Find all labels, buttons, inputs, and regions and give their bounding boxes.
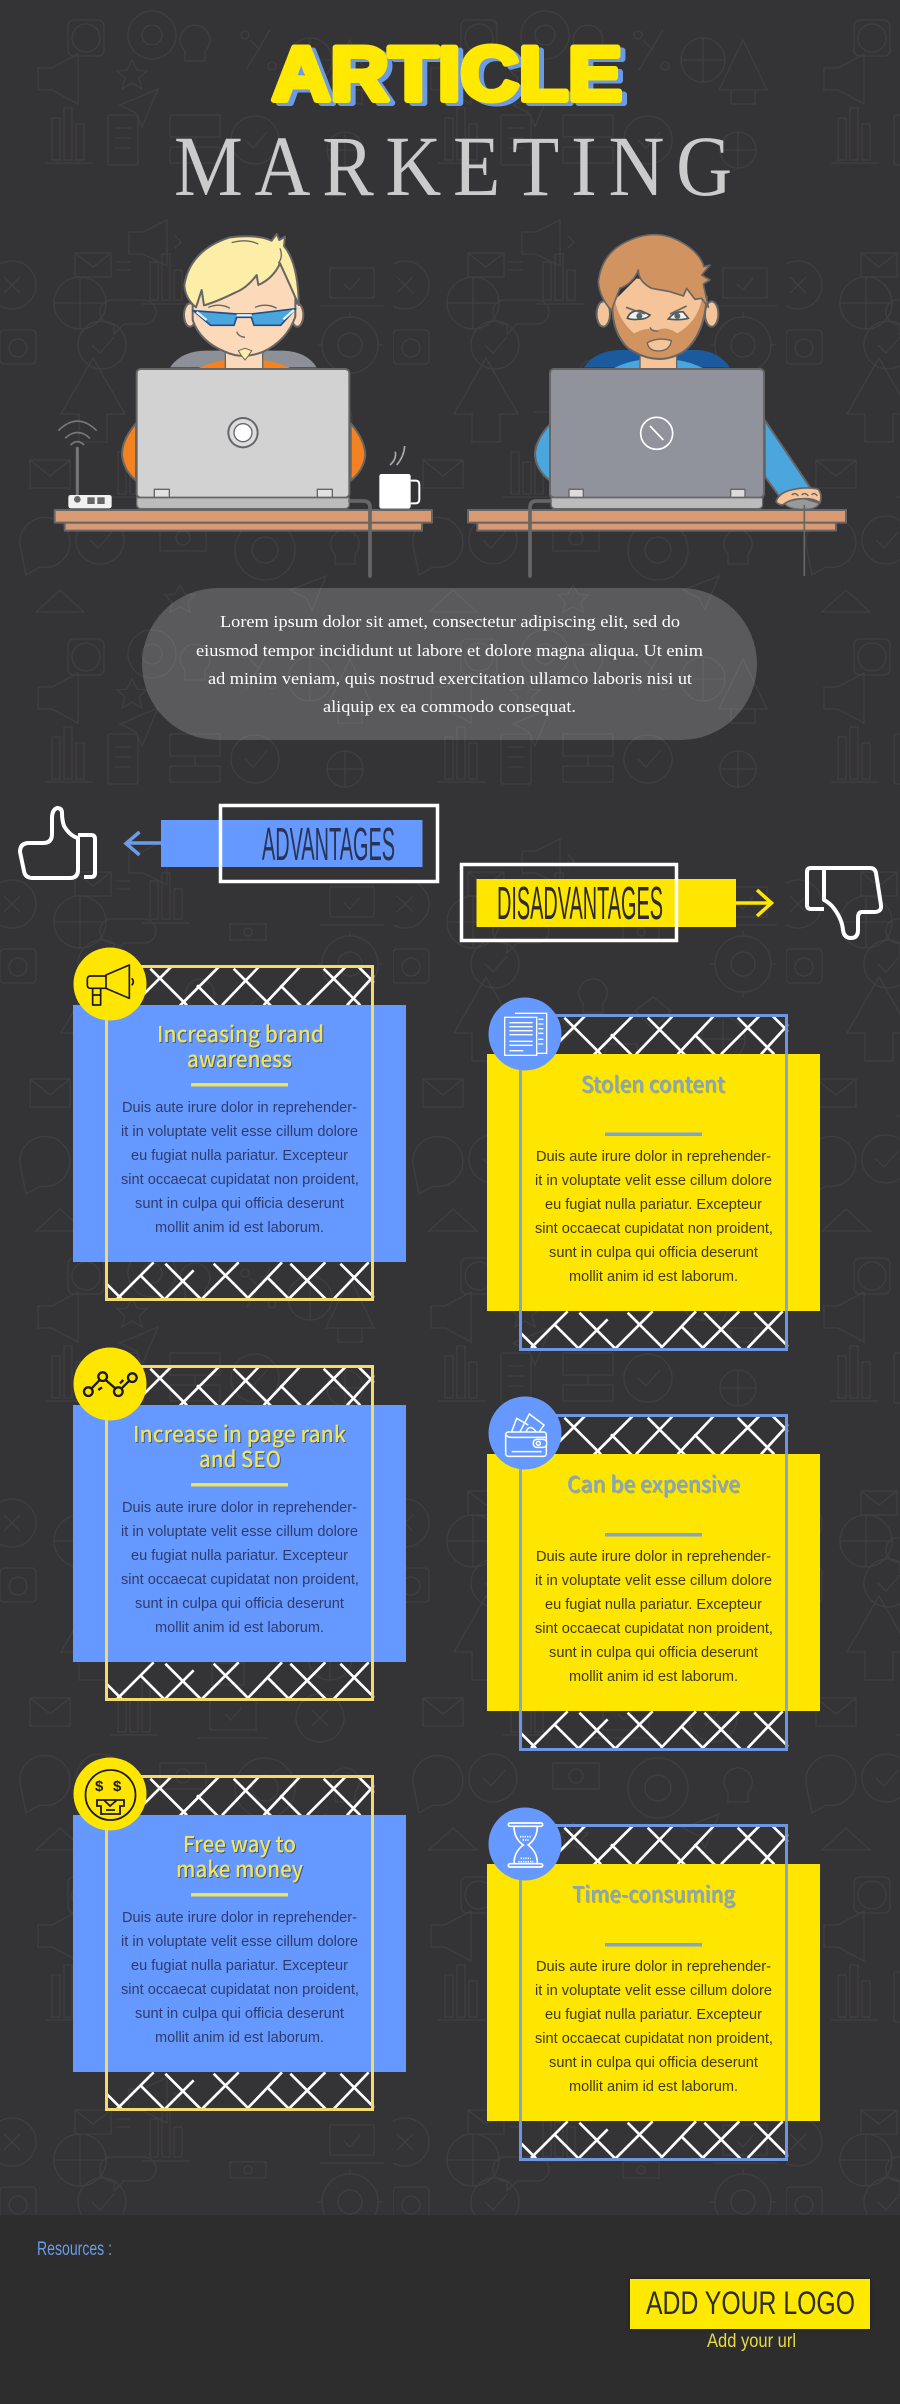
- body text: eu fugiat nulla pariatur. Excepteur: [545, 1597, 762, 1613]
- body text: mollit anim id est laborum.: [155, 2030, 324, 2046]
- body text: mollit anim id est laborum.: [569, 1269, 738, 1285]
- footer: [0, 2215, 900, 2404]
- intro text pill: ad minim veniam, quis nostrud exercitation ullamco laboris nisi ut: [208, 669, 692, 688]
- logo box: [630, 2279, 870, 2329]
- heading: Can be expensive: [567, 1467, 740, 1499]
- laptop: dark grey: [550, 369, 764, 509]
- panel: can be expensive: [487, 1396, 820, 1750]
- desk: [468, 510, 846, 531]
- body text: sunt in culpa qui officia deserunt: [549, 1645, 758, 1661]
- heading: [133, 1417, 346, 1474]
- heading: advantages: ADVANTAGES: [262, 818, 395, 870]
- arms: [122, 423, 365, 481]
- laptop: silver: [137, 369, 349, 509]
- panel: free way to make money: [73, 1758, 406, 2110]
- chair: [584, 350, 730, 367]
- body text: it in voluptate velit esse cillum dolore: [121, 1124, 358, 1140]
- body text: mollit anim id est laborum.: [569, 1669, 738, 1685]
- icon: coffee mug: [379, 446, 419, 509]
- body text: sint occaecat cupidatat non proident,: [535, 1621, 773, 1637]
- desk: [55, 510, 432, 531]
- arrow: disadvantages: [736, 890, 772, 916]
- heading: Free way to: [183, 1827, 296, 1859]
- resources label: Resources :: [37, 2239, 112, 2260]
- body text: Duis aute irure dolor in reprehender-: [122, 1500, 357, 1516]
- intro text pill: aliquip ex ea commodo consequat.: [323, 697, 576, 716]
- heading: disadvantages: DISADVANTAGES: [497, 877, 663, 929]
- shirt and neck: [613, 360, 703, 368]
- illustration: bearded man at laptop: [468, 235, 846, 576]
- body text: eu fugiat nulla pariatur. Excepteur: [131, 1148, 348, 1164]
- heading: advantages: [161, 806, 438, 882]
- icon: megaphone: [74, 948, 146, 1020]
- heading: Stolen content: [581, 1067, 725, 1099]
- body text: sint occaecat cupidatat non proident,: [121, 1572, 359, 1588]
- icon: documents: [488, 998, 562, 1070]
- body text: sint occaecat cupidatat non proident,: [535, 1221, 773, 1237]
- body text: eu fugiat nulla pariatur. Excepteur: [131, 1548, 348, 1564]
- heading: awareness: [187, 1042, 292, 1074]
- heading: Time-consuming: [572, 1877, 735, 1909]
- url text: Add your url: [707, 2331, 796, 2352]
- heading: [176, 1827, 303, 1884]
- arrow: advantages: [126, 832, 161, 855]
- body text: mollit anim id est laborum.: [569, 2079, 738, 2095]
- title: MARKETING: [174, 118, 732, 214]
- title: ARTICLE: [272, 32, 622, 117]
- cable: [350, 501, 370, 576]
- body text: Duis aute irure dolor in reprehender-: [536, 1549, 771, 1565]
- title: ARTICLE: [277, 35, 627, 120]
- heading: Increase in page rank: [133, 1417, 346, 1449]
- body text: sunt in culpa qui officia deserunt: [549, 2055, 758, 2071]
- chair: [170, 351, 317, 367]
- body text: eu fugiat nulla pariatur. Excepteur: [545, 1197, 762, 1213]
- body text: sunt in culpa qui officia deserunt: [549, 1245, 758, 1261]
- arms: [535, 420, 810, 497]
- intro text pill: eiusmod tempor incididunt ut labore et dolore magna aliqua. Ut enim: [196, 641, 703, 660]
- body text: it in voluptate velit esse cillum dolore: [535, 1573, 772, 1589]
- body text: Duis aute irure dolor in reprehender-: [122, 1910, 357, 1926]
- body text: Duis aute irure dolor in reprehender-: [536, 1149, 771, 1165]
- body text: Duis aute irure dolor in reprehender-: [536, 1959, 771, 1975]
- body text: sint occaecat cupidatat non proident,: [121, 1982, 359, 1998]
- icon: money face: $: [113, 1778, 122, 1795]
- body text: eu fugiat nulla pariatur. Excepteur: [545, 2007, 762, 2023]
- body text: [121, 1500, 359, 1636]
- body text: sunt in culpa qui officia deserunt: [135, 1196, 344, 1212]
- icon: wallet: [488, 1396, 562, 1470]
- panel: increasing brand awareness: [73, 948, 406, 1300]
- body text: [121, 1910, 359, 2046]
- body text: [535, 1959, 773, 2095]
- hand on mouse: [776, 488, 821, 509]
- heading: disadvantages: [462, 864, 736, 940]
- title: [174, 32, 732, 214]
- head: [184, 234, 303, 360]
- body text: it in voluptate velit esse cillum dolore: [121, 1524, 358, 1540]
- icon: money face: $: [95, 1778, 104, 1795]
- body text: it in voluptate velit esse cillum dolore: [535, 1983, 772, 1999]
- head: [597, 235, 718, 359]
- body text: sunt in culpa qui officia deserunt: [135, 2006, 344, 2022]
- heading: Increasing brand: [157, 1017, 324, 1049]
- body text: mollit anim id est laborum.: [155, 1620, 324, 1636]
- body text: sint occaecat cupidatat non proident,: [121, 1172, 359, 1188]
- icon: hourglass: [488, 1808, 562, 1880]
- body text: mollit anim id est laborum.: [155, 1220, 324, 1236]
- panel: time-consuming: [487, 1808, 820, 2160]
- icon: money face: [74, 1758, 146, 1830]
- icon: thumbs down: [807, 868, 881, 938]
- intro text pill: Lorem ipsum dolor sit amet, consectetur adipiscing elit, sed do: [220, 612, 680, 631]
- body text: sunt in culpa qui officia deserunt: [135, 1596, 344, 1612]
- illustration: blond man at laptop: [55, 234, 432, 576]
- body text: [535, 1149, 773, 1285]
- body text: it in voluptate velit esse cillum dolore: [121, 1934, 358, 1950]
- panel: increase in page rank and SEO: [73, 1348, 406, 1700]
- intro text pill: [142, 588, 757, 740]
- body text: sint occaecat cupidatat non proident,: [535, 2031, 773, 2047]
- heading: make money: [176, 1852, 303, 1884]
- body text: it in voluptate velit esse cillum dolore: [535, 1173, 772, 1189]
- panel: stolen content: [487, 998, 820, 1350]
- cables: [530, 501, 804, 576]
- heading: [157, 1017, 324, 1074]
- icon: wifi router: [58, 421, 112, 508]
- icon: thumbs up: [20, 808, 95, 878]
- body text: [121, 1100, 359, 1236]
- shirt and neck: [198, 360, 291, 368]
- icon: connected nodes: [74, 1348, 146, 1420]
- heading: and SEO: [199, 1442, 281, 1474]
- body text: eu fugiat nulla pariatur. Excepteur: [131, 1958, 348, 1974]
- body text: [535, 1549, 773, 1685]
- body text: Duis aute irure dolor in reprehender-: [122, 1100, 357, 1116]
